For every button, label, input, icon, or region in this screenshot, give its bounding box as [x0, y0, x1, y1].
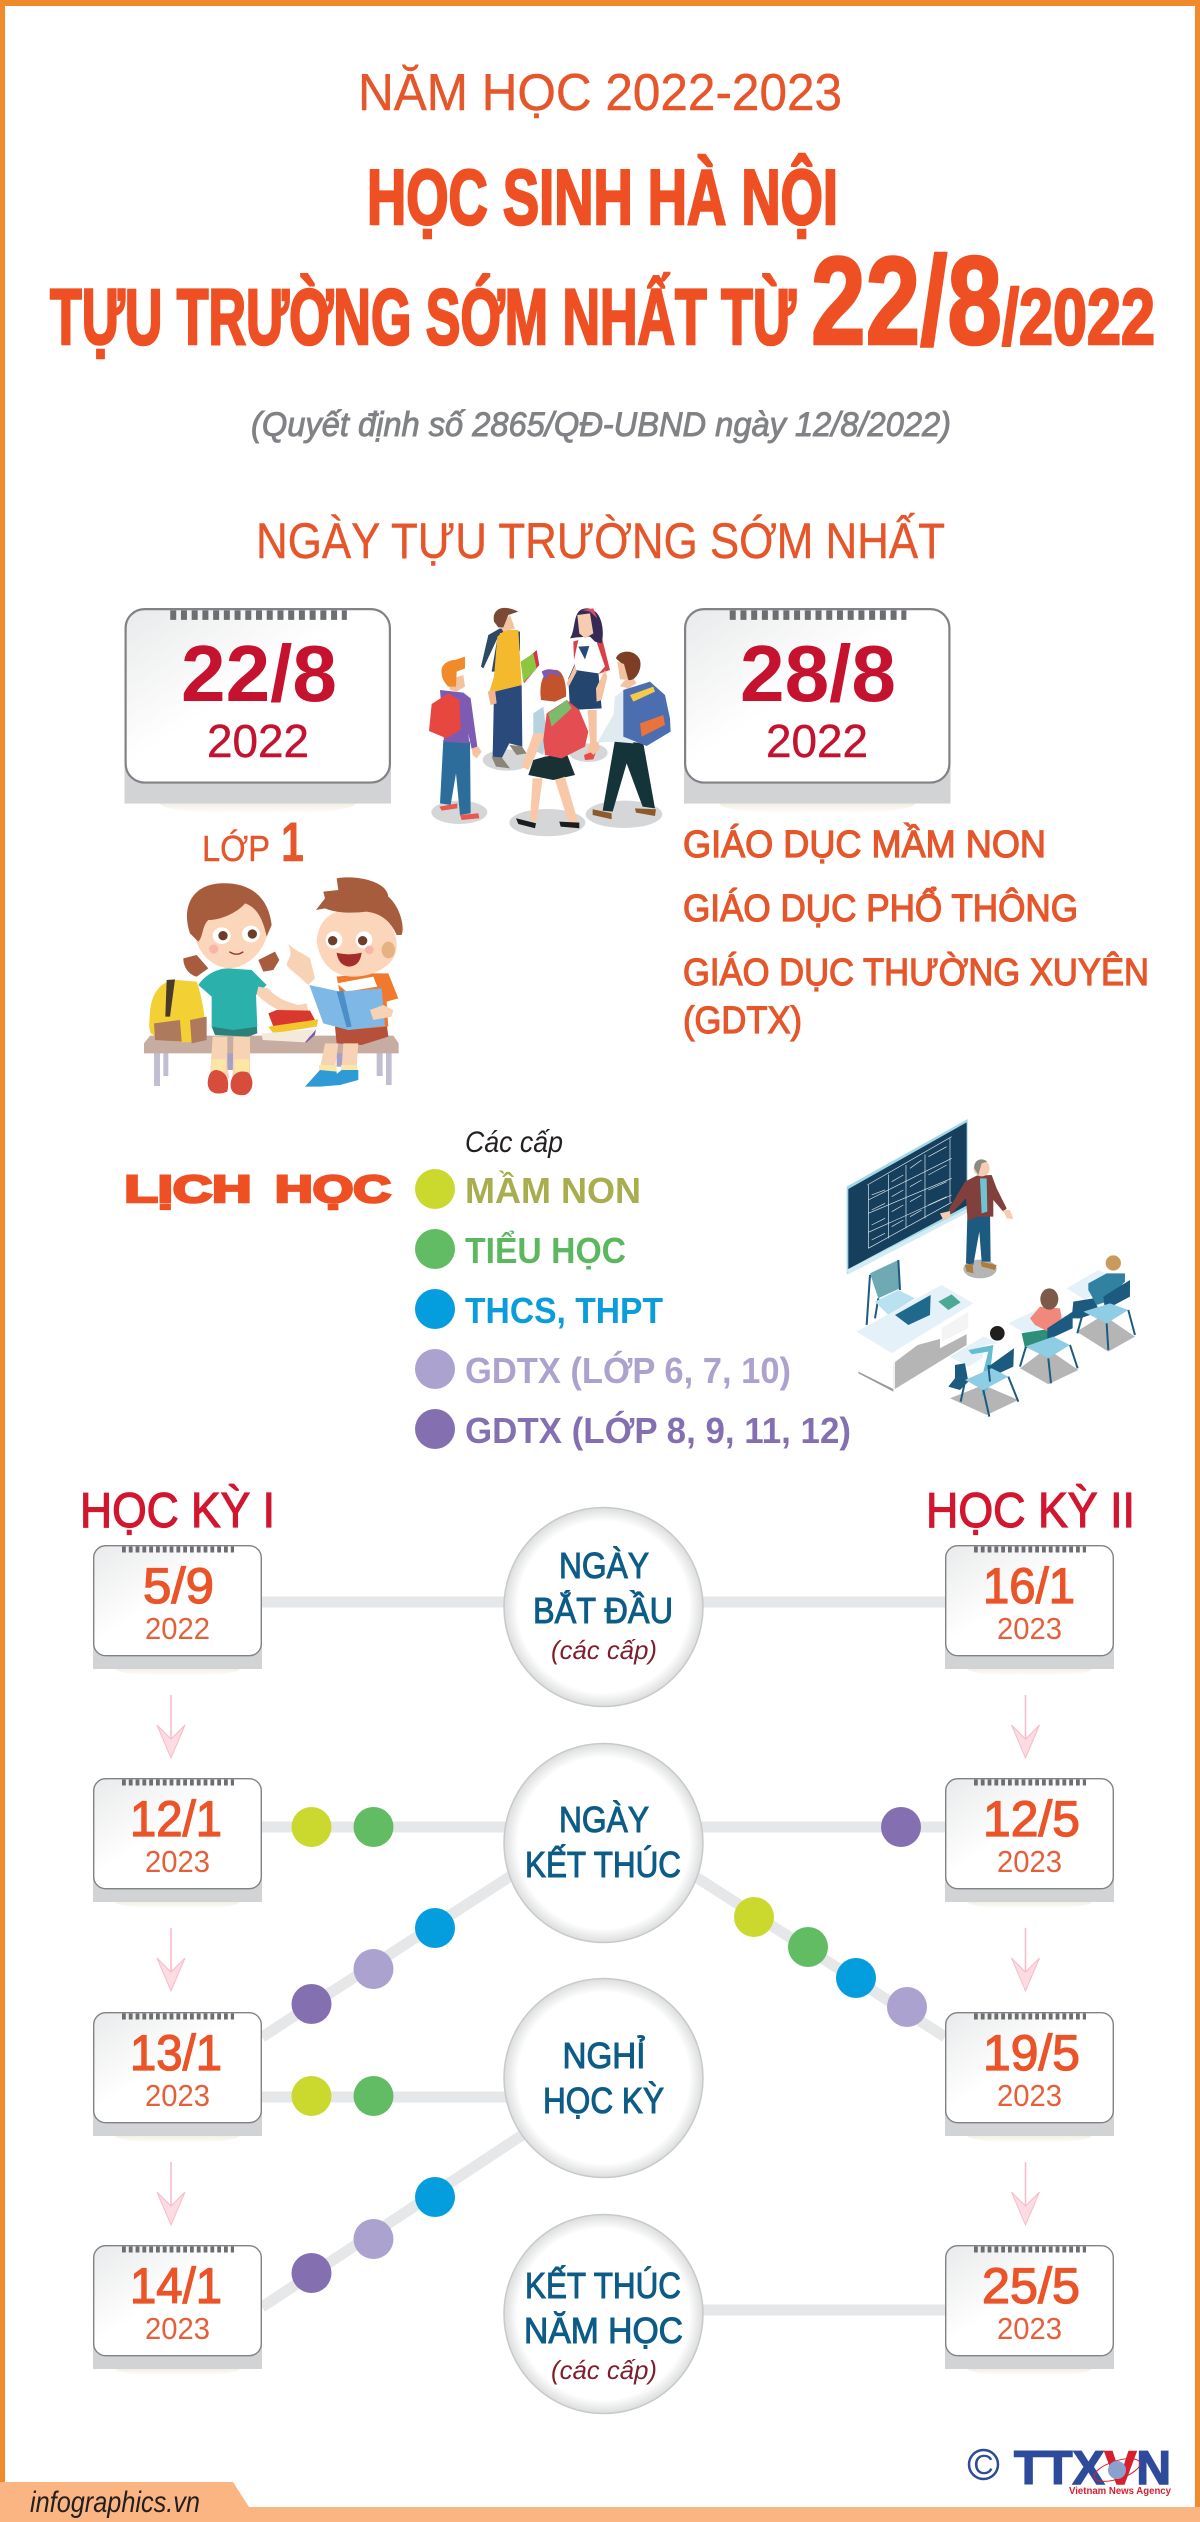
calendar: 12/1/2023 — [93, 1779, 262, 1909]
list: levels starting 28/8: GIÁO DỤC THƯỜNG XUYÊN — [683, 951, 1149, 994]
calendar: 28/8/2022: 2022 — [766, 715, 868, 767]
calendar: 5/9/2022 — [93, 1546, 262, 1676]
calendar: 22/8/2022: 2022 — [207, 715, 309, 767]
calendar: 13/1/2023 — [93, 2013, 262, 2143]
heading: semester II: HỌC KỲ II — [926, 1484, 1135, 1538]
calendar: 12/5/2023: 2023 — [997, 1844, 1062, 1879]
legend item: GDTX 6, 7, 10: GDTX (LỚP 6, 7, 10) — [465, 1349, 791, 1391]
heading: semester I: HỌC KỲ I — [80, 1484, 275, 1538]
calendar: 25/5/2023: 2023 — [997, 2311, 1062, 2346]
dots: end of semester I — [292, 1807, 394, 1847]
dots: semester I break for secondary and GDTX — [292, 1908, 455, 2024]
legend item: GDTX 8, 9, 11, 12: GDTX (LỚP 8, 9, 11, 12) — [465, 1409, 851, 1451]
node: semester break: NGHỈ — [562, 2035, 646, 2076]
title block — [50, 64, 1155, 371]
calendar: 25/5/2023 — [945, 2246, 1114, 2376]
node: start date: BẮT ĐẦU — [533, 1589, 673, 1631]
list: levels starting 28/8: GIÁO DỤC PHỔ THÔNG — [683, 885, 1078, 930]
heading: study schedule: HỌC — [275, 1169, 391, 1211]
calendar: 13/1/2023: 2023 — [145, 2078, 210, 2113]
node: end of school year: NĂM HỌC — [524, 2310, 683, 2351]
dots: 14/1 break — [292, 2177, 455, 2293]
calendar: 12/5/2023 — [945, 1779, 1114, 1909]
calendar: 16/1/2023: 2023 — [997, 1611, 1062, 1646]
logo: TTXVN: C — [974, 2449, 994, 2480]
title: year: /2022 — [1002, 272, 1155, 361]
label: grade 1: LỚP — [202, 828, 270, 869]
node: semester break: HỌC KỲ — [543, 2080, 664, 2121]
calendar: 14/1/2023: 14/1 — [130, 2258, 222, 2314]
legend item: preschool: MẦM NON — [465, 1170, 641, 1211]
calendar: 14/1/2023: 2023 — [145, 2311, 210, 2346]
title: main line 2: TỰU TRƯỜNG SỚM NHẤT TỪ — [50, 272, 796, 361]
logo: TTXVN: Vietnam News Agency — [1069, 2486, 1171, 2497]
label: grade 1 — [202, 810, 304, 873]
calendar: 19/5/2023 — [945, 2013, 1114, 2143]
node: end date: NGÀY — [559, 1799, 649, 1840]
legend: education levels: Các cấp — [465, 1126, 563, 1159]
label: grade 1: 1 — [281, 810, 304, 873]
title: big date: 22/8 — [811, 232, 1002, 371]
footer: peach band and tab — [0, 2482, 1200, 2522]
list: levels starting 28/8 — [683, 822, 1149, 1042]
arrows: semester I timeline — [157, 1695, 185, 2225]
calendar: 19/5/2023: 19/5 — [983, 2025, 1080, 2081]
dots: 13/1 break — [292, 2076, 394, 2116]
calendar: 12/1/2023: 2023 — [145, 1844, 210, 1879]
footer: website: infographics.vn — [30, 2486, 200, 2519]
node: end date — [504, 1744, 703, 1942]
illustration: group of students — [429, 608, 671, 836]
dots: end of semester II others — [734, 1897, 927, 2027]
heading: study schedule: LỊCH — [124, 1169, 252, 1211]
node: end of school year — [504, 2214, 703, 2414]
node: end of school year: KẾT THÚC — [525, 2265, 681, 2306]
node: semester break — [504, 1978, 703, 2178]
list: levels starting 28/8: GIÁO DỤC MẦM NON — [683, 822, 1046, 866]
calendar: 28/8/2022 — [684, 609, 951, 815]
calendar: 12/5/2023: 12/5 — [983, 1791, 1080, 1847]
logo: TTXVN: TTXVN — [1014, 2441, 1171, 2494]
node: start date: NGÀY — [559, 1545, 649, 1586]
node: start date — [504, 1508, 703, 1706]
heading: earliest return date: NGÀY TỰU TRƯỜNG SỚM NHẤT — [256, 513, 945, 569]
illustration: classroom — [847, 1119, 1135, 1417]
title: school year: NĂM HỌC 2022-2023 — [358, 64, 842, 122]
calendar: 22/8/2022: 22/8 — [181, 629, 337, 718]
calendar: 13/1/2023: 13/1 — [130, 2025, 222, 2081]
calendar: 5/9/2022: 5/9 — [143, 1558, 214, 1614]
calendar: 16/1/2023: 16/1 — [983, 1558, 1075, 1614]
title: main line 1: HỌC SINH HÀ NỘI — [367, 153, 838, 241]
calendar: 25/5/2023: 25/5 — [982, 2258, 1080, 2314]
heading: study schedule — [124, 1169, 391, 1211]
legend: education levels — [415, 1126, 851, 1451]
calendar: 22/8/2022 — [124, 609, 391, 815]
node: end of school year: (các cấp) — [551, 2355, 657, 2385]
calendar: 16/1/2023 — [945, 1546, 1114, 1676]
node: end date: KẾT THÚC — [525, 1844, 681, 1885]
dot: end of semester II GDTX — [881, 1807, 921, 1847]
arrows: semester II timeline — [1012, 1695, 1040, 2225]
list: levels starting 28/8: (GDTX) — [683, 1000, 802, 1042]
calendar: 14/1/2023 — [93, 2246, 262, 2376]
calendar: 28/8/2022: 28/8 — [740, 629, 896, 718]
connectors between calendars and nodes — [262, 1602, 945, 2310]
legend item: secondary: THCS, THPT — [465, 1290, 663, 1331]
legend item: primary: TIỂU HỌC — [465, 1229, 626, 1271]
calendar: 5/9/2022: 2022 — [145, 1611, 210, 1646]
calendar: 19/5/2023: 2023 — [997, 2078, 1062, 2113]
node: start date: (các cấp) — [551, 1635, 657, 1665]
subtitle: decision reference: (Quyết định số 2865/QĐ-UBND ngày 12/8/2022) — [251, 406, 951, 444]
calendar: 12/1/2023: 12/1 — [130, 1791, 222, 1847]
illustration: two children on a bench — [144, 877, 403, 1095]
